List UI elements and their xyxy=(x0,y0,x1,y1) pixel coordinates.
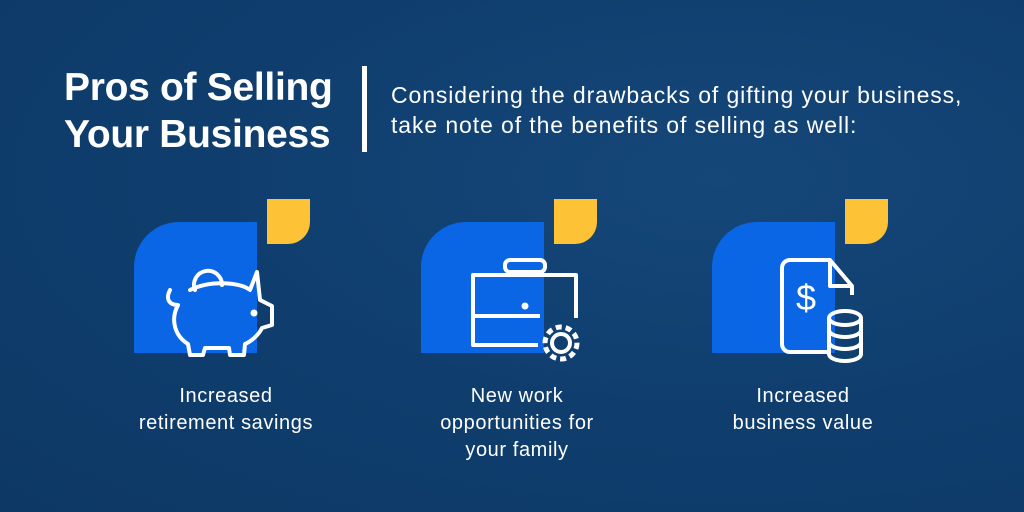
label 3: business value xyxy=(733,412,873,434)
label 2: your family xyxy=(465,439,569,461)
intro text: take note of the benefits of selling as well: xyxy=(391,112,857,138)
label 2: opportunities for xyxy=(440,412,594,434)
intro text: Considering the drawbacks of gifting your business, xyxy=(391,82,962,108)
label 1: Increased xyxy=(179,385,273,407)
title: Your Business xyxy=(64,113,330,156)
divider line xyxy=(362,66,367,152)
label 1 xyxy=(139,385,313,434)
intro text xyxy=(391,82,962,138)
card 3 icon: invoice with coins xyxy=(712,199,888,361)
card 1 icon: piggy bank xyxy=(134,199,310,355)
label 1: retirement savings xyxy=(139,412,313,434)
label 2 xyxy=(440,385,594,461)
label 3: Increased xyxy=(756,385,850,407)
title: Pros of Selling xyxy=(64,66,333,109)
title xyxy=(64,66,333,156)
label 2: New work xyxy=(471,385,563,407)
card 3 icon: invoice with coins: $ xyxy=(796,277,816,318)
label 3 xyxy=(733,385,873,434)
card 2 icon: briefcase with gear xyxy=(421,199,597,359)
